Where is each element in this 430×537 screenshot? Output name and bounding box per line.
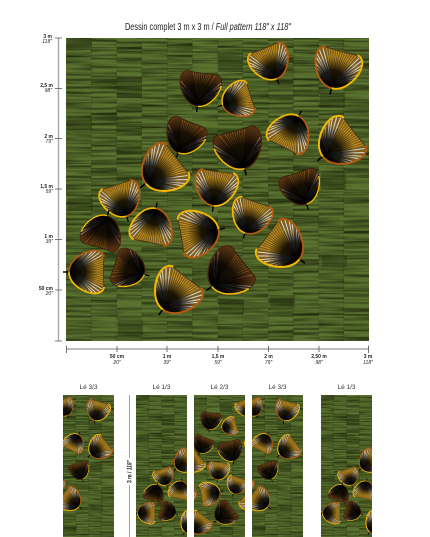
leaf 15 — [177, 205, 229, 259]
leaf 13 — [224, 195, 275, 245]
leaf 1 — [176, 70, 223, 115]
label: 1 m: 39" — [46, 239, 53, 245]
label: 1,5 m: 1,5 m — [40, 184, 54, 190]
leaf 14 — [252, 215, 320, 283]
label: 1 m: 1 m — [44, 234, 54, 240]
label: 2 m: 2 m — [44, 134, 54, 140]
label: 1,5 m: 59" — [46, 189, 53, 195]
strip label: Lé 1/3: Lé 1/3 — [152, 384, 171, 391]
leaf 9 — [125, 139, 193, 207]
strip label: Lé 3/3: Lé 3/3 — [79, 384, 98, 391]
strip 5: Lé 1/3 — [321, 395, 372, 537]
label: 1,5 m: 59" — [214, 360, 222, 366]
strip 2: Lé 1/3 — [136, 395, 187, 537]
leaf 3 — [245, 40, 298, 92]
leaf 21 — [191, 242, 259, 310]
leaf 6 — [302, 112, 370, 180]
leaf 4 — [307, 45, 364, 101]
leaf 18 — [63, 250, 104, 294]
label: 1 m: 39" — [163, 360, 171, 366]
strip label: Lé 2/3: Lé 2/3 — [210, 384, 229, 391]
green woven background — [66, 38, 369, 341]
full pattern panel — [63, 38, 370, 341]
leaf 5 — [264, 101, 321, 157]
strip label: Lé 3/3: Lé 3/3 — [268, 384, 287, 391]
label: 2 m: 2 m — [264, 354, 273, 360]
strip 4: Lé 3/3 — [252, 395, 303, 537]
strip 1: Lé 3/3 — [63, 395, 114, 537]
vertical ruler — [39, 34, 62, 341]
label: 50 cm: 20" — [112, 360, 121, 366]
strip 3: Lé 2/3 — [194, 395, 245, 537]
label: 2,5 m: 98" — [45, 88, 52, 94]
title: Dessin complet 3 m x 3 m / Full pattern 118" x 118" — [125, 22, 291, 33]
label: 1 m: 1 m — [163, 354, 172, 360]
label: 3 m: 3 m — [43, 34, 53, 40]
leaf 10 — [191, 168, 240, 215]
leaf 8 — [157, 114, 210, 166]
label: 2,5 m: 2,5 m — [40, 83, 54, 89]
strip label: Lé 1/3: Lé 1/3 — [337, 384, 356, 391]
leaf 17 — [78, 204, 128, 254]
height measure: 3 m / 118": 3 m / 118" — [126, 459, 134, 483]
leaf 7 — [211, 124, 270, 182]
leaf 12 — [277, 166, 328, 216]
label: 2,50 m: 2,50 m — [311, 354, 327, 360]
label: 2 m: 79" — [265, 360, 272, 366]
label: 50 cm: 50 cm — [110, 354, 125, 360]
label: 3 m: 118" — [42, 39, 52, 45]
leaf 16 — [128, 198, 178, 247]
leaf 19 — [108, 246, 155, 294]
label: 50 cm: 50 cm — [39, 286, 54, 292]
label: 2 m: 79" — [46, 139, 53, 145]
leaf 20 — [139, 262, 207, 330]
label: 3 m: 118" — [363, 360, 373, 366]
leaf 11 — [97, 178, 148, 228]
label: 50 cm: 20" — [45, 291, 53, 297]
label: 3 m: 3 m — [364, 354, 373, 360]
label: 2,50 m: 98" — [315, 360, 323, 366]
leaf 2 — [212, 78, 257, 124]
label: 1,5 m: 1,5 m — [212, 354, 225, 360]
horizontal ruler — [66, 346, 373, 366]
